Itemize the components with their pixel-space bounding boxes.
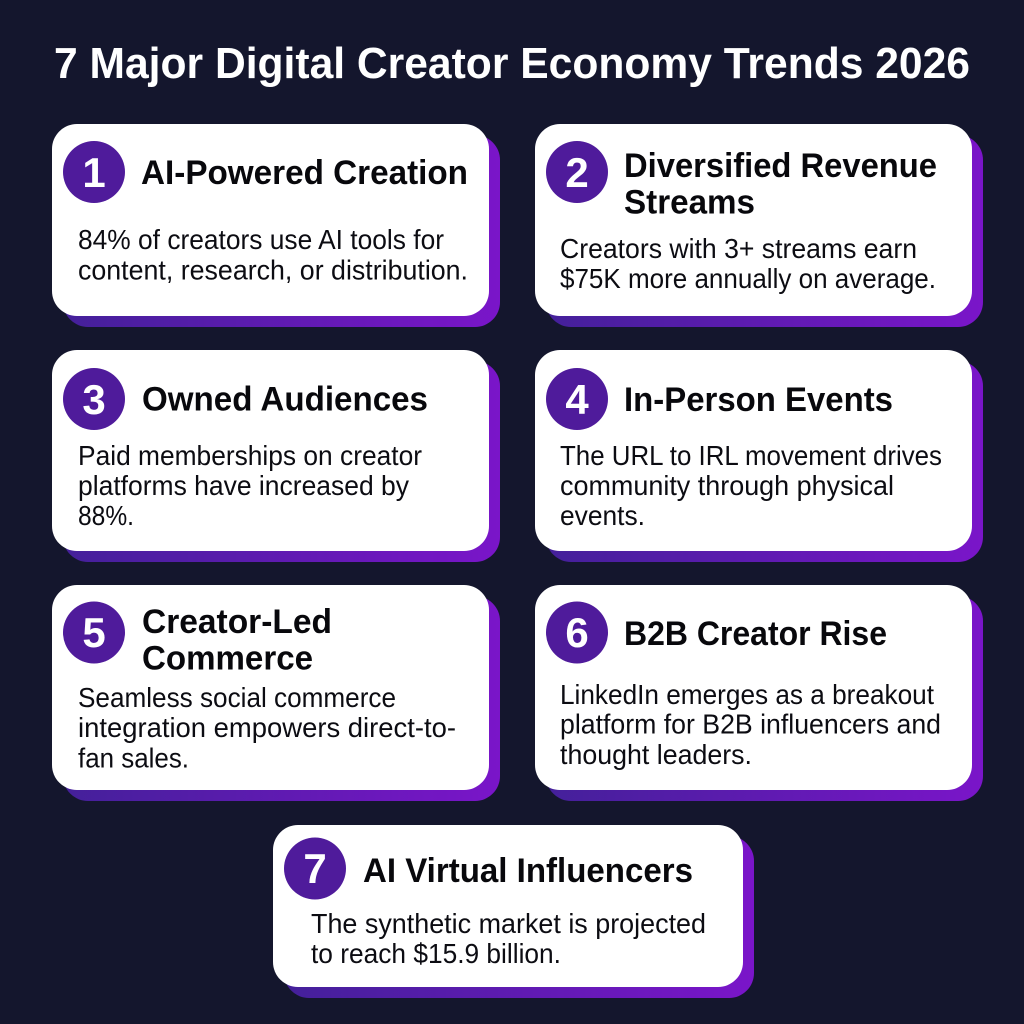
body text: Seamless social commerce [78, 682, 396, 713]
number badge 4: 4 [565, 376, 589, 423]
number badge 1: 1 [82, 149, 106, 196]
body text: events. [560, 500, 645, 531]
body text [78, 224, 468, 286]
body text [560, 233, 936, 294]
body text: 84% of creators use AI tools for [78, 224, 444, 255]
body text: 88%. [78, 500, 134, 531]
body text: The synthetic market is projected [311, 908, 706, 939]
heading: Creator-Led [142, 603, 332, 641]
body text: integration empowers direct-to- [78, 712, 456, 743]
body text: platform for B2B influencers and [560, 708, 941, 740]
heading: AI-Powered Creation [141, 154, 468, 192]
body text: content, research, or distribution. [78, 254, 468, 286]
body text: The URL to IRL movement drives [560, 440, 942, 471]
number badge 5: 5 [82, 609, 106, 656]
number badge 3 [63, 368, 125, 430]
panel: trend 1 AI-Powered Creation [52, 124, 500, 327]
panel: trend 4 In-Person Events [535, 350, 983, 562]
heading: Owned Audiences [142, 380, 428, 418]
body text: LinkedIn emerges as a breakout [560, 679, 934, 710]
number badge 2 [546, 141, 608, 203]
heading: Commerce [142, 640, 313, 678]
panel: trend 7 AI Virtual Influencers [273, 825, 754, 998]
number badge 4 [546, 368, 608, 430]
heading: Diversified Revenue [624, 147, 937, 185]
body text [560, 679, 941, 770]
body text [78, 682, 456, 774]
title: 7 Major Digital Creator Economy Trends 2026 [54, 39, 970, 88]
number badge 7: 7 [303, 845, 327, 892]
panel: trend 6 B2B Creator Rise [535, 585, 983, 801]
number badge 6 [546, 602, 608, 664]
body text: fan sales. [78, 742, 189, 774]
body text: $75K more annually on average. [560, 263, 936, 294]
number badge 2: 2 [565, 149, 589, 196]
panel: trend 5 Creator-Led Commerce [52, 585, 500, 801]
number badge 3: 3 [82, 376, 106, 423]
heading: In-Person Events [624, 381, 893, 419]
heading [142, 603, 332, 678]
body text [560, 440, 942, 531]
heading [624, 147, 937, 222]
number badge 6: 6 [565, 609, 589, 656]
body text [311, 908, 706, 969]
number badge 1 [63, 141, 125, 203]
heading: AI Virtual Influencers [363, 852, 693, 890]
heading: Streams [624, 184, 755, 222]
body text: platforms have increased by [78, 470, 409, 501]
body text: to reach $15.9 billion. [311, 938, 561, 969]
body text: thought leaders. [560, 739, 752, 770]
body text: Creators with 3+ streams earn [560, 233, 917, 264]
panel: trend 2 Diversified Revenue Streams [535, 124, 983, 327]
body text: community through physical [560, 470, 894, 501]
number badge 5 [63, 602, 125, 664]
number badge 7 [284, 838, 346, 900]
heading: B2B Creator Rise [624, 615, 887, 653]
panel: trend 3 Owned Audiences [52, 350, 500, 562]
body text [78, 440, 422, 531]
body text: Paid memberships on creator [78, 440, 422, 471]
